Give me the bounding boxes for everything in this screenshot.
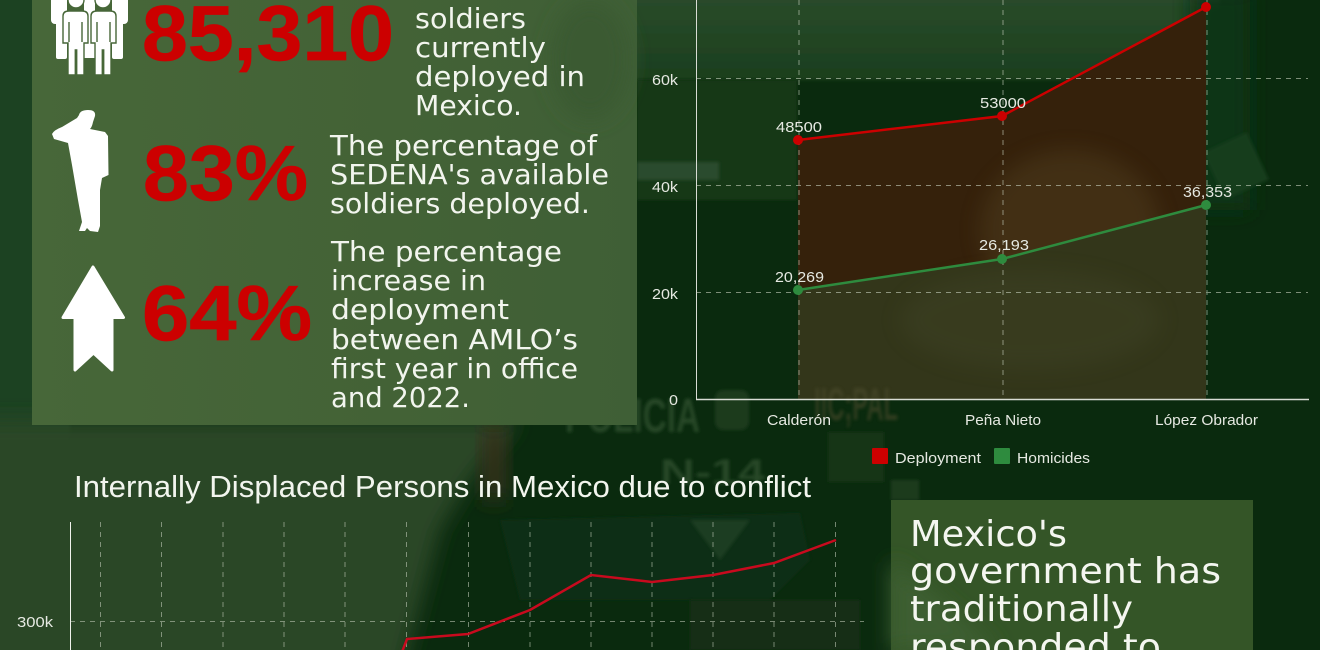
chart: deployment and homicides by presidency: [652, 0, 1309, 467]
series: displaced persons line: [402, 540, 836, 650]
text: percentage increase in deployment: The percentage: [330, 236, 562, 268]
chart: internally displaced persons: [17, 522, 864, 650]
text: percentage increase in deployment: and 2022.: [331, 382, 470, 414]
text: percentage of SEDENA soldiers deployed: [329, 130, 609, 220]
series: deployment line: [793, 2, 1211, 145]
axis labels and data labels: 20k: [652, 286, 679, 303]
icon: group of soldiers: [51, 0, 128, 75]
axis labels and data labels: 48500: [776, 119, 822, 136]
axis labels and data labels: 53000: [980, 95, 1026, 112]
icon: up arrow: [63, 267, 124, 370]
stat: 64%: 64%: [142, 269, 312, 357]
axis labels and data labels: 60k: [652, 72, 679, 89]
text: soldiers currently deployed: [415, 3, 585, 122]
axis labels and data labels: 26,193: [979, 237, 1029, 254]
legend: Deployment: [895, 450, 982, 467]
legend: [872, 448, 1090, 467]
panel: deployment statistics: [32, 0, 637, 425]
text: percentage increase in deployment: first year in office: [331, 353, 578, 385]
legend: Homicides: [1017, 450, 1090, 467]
text block: Mexico's: [910, 514, 1067, 555]
axis labels and data labels: 20,269: [775, 269, 824, 286]
icon: saluting soldier: [52, 110, 108, 232]
text: percentage increase in deployment: [330, 236, 578, 414]
stat: 83%: 83%: [143, 129, 308, 217]
axis labels and data labels: Peña Nieto: [965, 412, 1041, 429]
text: percentage increase in deployment: increase in: [331, 265, 486, 297]
text: percentage increase in deployment: deployment: [331, 294, 509, 326]
heading: internally displaced persons: Internally Displaced Persons in Mexico due to conflict: [74, 469, 811, 504]
text: soldiers currently deployed: currently: [415, 32, 546, 64]
text block: [910, 514, 1221, 650]
y-axis label: 300k: [17, 614, 54, 631]
text: percentage of SEDENA soldiers deployed: The percentage of: [329, 130, 598, 162]
panel: government response text: [891, 500, 1253, 650]
text: soldiers currently deployed: Mexico.: [415, 90, 522, 122]
axis labels and data labels: 36,353: [1183, 184, 1232, 201]
text: percentage of SEDENA soldiers deployed: soldiers deployed.: [330, 188, 590, 220]
background photo: POLICIA: [565, 390, 700, 443]
text: percentage of SEDENA soldiers deployed: SEDENA's available: [330, 159, 609, 191]
background photo: N-14: [660, 453, 766, 492]
axis labels and data labels: [652, 72, 1258, 429]
axis labels and data labels: López Obrador: [1155, 412, 1258, 429]
text: soldiers currently deployed: soldiers: [415, 3, 526, 35]
chart: deployment and homicides by presidency: IIC;PAL: [814, 378, 898, 430]
text block: traditionally: [910, 589, 1133, 630]
text block: government has: [910, 551, 1221, 592]
series: homicides line: [793, 200, 1211, 295]
axis labels and data labels: Calderón: [767, 412, 831, 429]
text: percentage increase in deployment: between AMLO’s: [331, 324, 578, 356]
text: soldiers currently deployed: deployed in: [415, 61, 585, 93]
axis labels and data labels: 40k: [652, 179, 679, 196]
axis labels and data labels: 0: [669, 392, 678, 409]
